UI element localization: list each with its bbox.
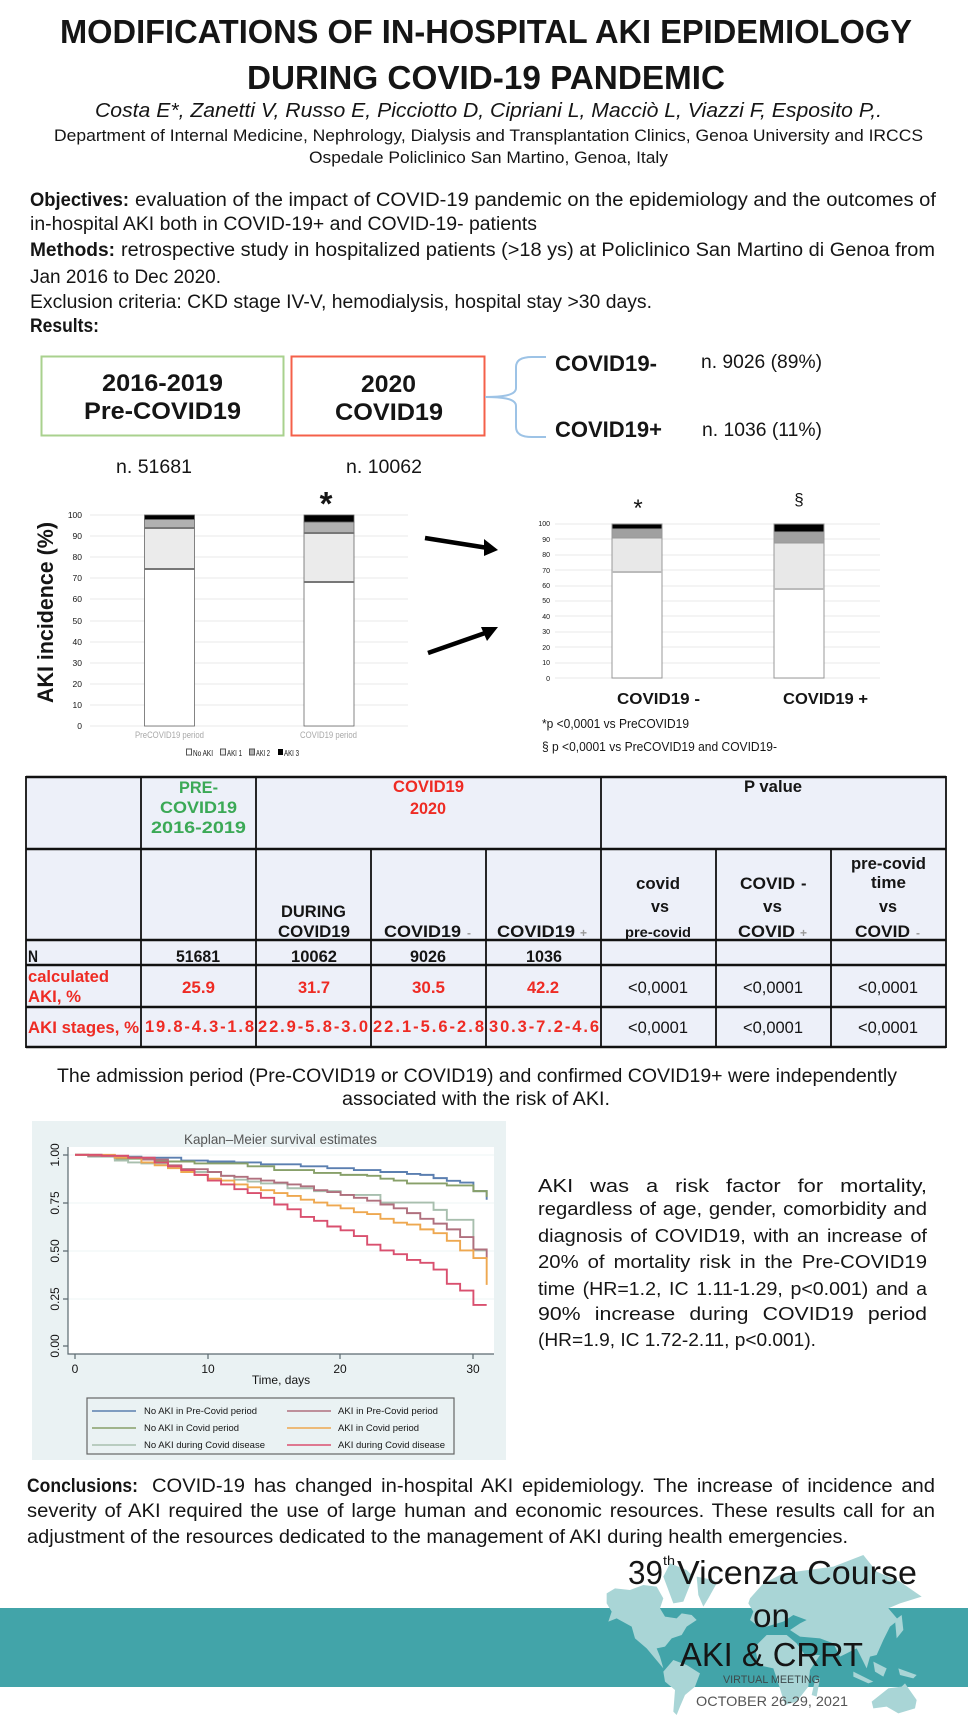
text block: conclusions: adjustment of the resources dedicated to the management of AKI during health emergencies. [27, 1527, 848, 1548]
text block: objectives and methods: in-hospital AKI both in COVID-19+ and COVID-19- patients [30, 214, 537, 235]
text block: conclusions [27, 1476, 935, 1548]
text block: objectives and methods: Objectives: [30, 190, 129, 211]
chart: AKI incidence by COVID status: 60 [542, 583, 550, 590]
text block: mortality risk [538, 1176, 928, 1350]
y axis labels: 0.00 [48, 1334, 62, 1358]
text block: independent association [57, 1066, 898, 1110]
text block: mortality risk: regardless of age, gender, comorbidity and [538, 1199, 927, 1219]
text block: objectives and methods: Methods: [30, 240, 115, 261]
subgroup labels: n. 9026 (89%) [701, 352, 822, 373]
chart: overall AKI incidence: 10 [73, 700, 82, 710]
survival legend: AKI during Covid disease [338, 1440, 445, 1451]
table subheader row: COVID [738, 923, 795, 941]
table subheader row: COVID19 [497, 923, 575, 941]
chart: AKI incidence by COVID status: 70 [542, 568, 550, 575]
table subheader row: COVID [855, 923, 910, 941]
chart: AKI incidence by COVID status: COVID19 + [783, 691, 868, 708]
title: DURING COVID-19 PANDEMIC [247, 59, 725, 96]
table header row: 2020 [410, 800, 446, 818]
brace connector [485, 357, 546, 437]
chart: AKI incidence by COVID status: 0 [546, 676, 550, 683]
table row: calculated AKI: 42.2 [527, 979, 559, 997]
survival curves [75, 1155, 487, 1305]
chart: Kaplan-Meier survival [32, 1121, 506, 1460]
chart: AKI incidence by COVID status: 20 [542, 645, 550, 652]
x axis labels: 0 [72, 1362, 79, 1376]
table subheader row: COVID19 [384, 923, 461, 941]
text block: objectives and methods: evaluation of the impact of COVID-19 pandemic on the epidemiology and the outcomes of [135, 190, 937, 211]
text block: objectives and methods: Exclusion criteria: CKD stage IV-V, hemodialysis, hospital stay >30 days. [30, 292, 652, 313]
table subheader row: vs [651, 898, 669, 916]
box: 2020 COVID19: 2020 [361, 371, 416, 398]
bar: COVID19 negative [612, 524, 662, 678]
text block: conclusions: severity of AKI required the use of large human and economic resources. These results call for an [27, 1501, 935, 1522]
arrow: up to right chart [428, 627, 498, 653]
logo text: 39th Vicenza Course on AKI & CRRT: Vicenza Course [677, 1554, 917, 1591]
text block: conclusions: Conclusions: [27, 1476, 138, 1497]
survival legend: No AKI in Covid period [144, 1423, 239, 1434]
sample sizes: n. 51681 [116, 457, 192, 478]
chart: overall AKI incidence: 80 [73, 552, 82, 562]
text block: mortality risk: AKI was a risk factor for mortality, [538, 1176, 927, 1196]
affiliation: Department of Internal Medicine, Nephrology, Dialysis and Transplantation Clinics, Genoa University and IRCCS [54, 127, 923, 145]
world map [607, 1555, 922, 1715]
table subheader row: pre-covid [851, 855, 926, 873]
footnotes: § p <0,0001 vs PreCOVID19 and COVID19- [542, 740, 777, 754]
affiliation [54, 127, 923, 167]
table subheader row: + [800, 926, 807, 940]
chart: overall AKI incidence: 20 [73, 679, 82, 689]
table header row: COVID19 [393, 778, 464, 796]
table row: N: 51681 [176, 948, 220, 966]
box: 2016-2019 Pre-COVID19 [42, 356, 284, 436]
table row: calculated AKI: 25.9 [182, 979, 215, 997]
chart legend [186, 749, 299, 758]
y axis title: AKI incidence (%) [33, 522, 58, 703]
table row: AKI stages: <0,0001 [628, 1019, 688, 1037]
chart: AKI incidence by COVID status: § [794, 490, 804, 509]
survival legend: AKI in Pre-Covid period [338, 1406, 438, 1417]
subgroup labels: COVID19- [555, 351, 657, 376]
table row: calculated AKI: <0,0001 [628, 979, 688, 997]
authors: Costa E*, Zanetti V, Russo E, Picciotto D, Cipriani L, Macciò L, Viazzi F, Esposito P,. [95, 100, 882, 122]
table subheader row: covid [636, 875, 680, 893]
table header row: 2016-2019 [151, 819, 246, 837]
table row: AKI stages: <0,0001 [858, 1019, 918, 1037]
chart: overall AKI incidence: 30 [73, 658, 82, 668]
box: 2020 COVID19 [292, 356, 484, 436]
chart: overall AKI incidence: 100 [68, 510, 82, 520]
chart: overall AKI incidence: 0 [77, 721, 82, 731]
chart: overall AKI incidence: 60 [73, 594, 82, 604]
table subheader row: + [580, 926, 587, 940]
table subheader row: COVID [740, 875, 795, 893]
x axis labels: 20 [333, 1362, 347, 1376]
text block: mortality risk: time (HR=1.2, IC 1.11-1.29, p<0.001) and a [538, 1279, 928, 1299]
chart: AKI incidence by COVID status [538, 490, 880, 708]
table row: AKI stages: 30.3-7.2-4.6 [489, 1018, 599, 1036]
table row: calculated AKI [28, 968, 918, 1006]
chart: AKI incidence by COVID status: 90 [542, 537, 550, 544]
title: MODIFICATIONS OF IN-HOSPITAL AKI EPIDEMIOLOGY [60, 13, 912, 50]
chart: overall AKI incidence: 70 [73, 573, 82, 583]
table row: calculated AKI: 30.5 [412, 979, 445, 997]
logo text: 39th Vicenza Course on AKI & CRRT: 39 [628, 1554, 663, 1591]
chart: Kaplan-Meier survival: Kaplan–Meier survival estimates [184, 1131, 377, 1147]
chart: overall AKI incidence [68, 510, 408, 758]
significance asterisk: * [320, 485, 333, 522]
table subheader row: - [916, 926, 920, 940]
table subheader row: vs [879, 898, 897, 916]
sample sizes [116, 457, 422, 478]
text block: mortality risk: 90% increase during COVID19 period [538, 1304, 927, 1324]
text block: mortality risk: (HR=1.9, IC 1.72-2.11, p<0.001). [538, 1330, 816, 1350]
logo text: 39th Vicenza Course on AKI & CRRT [628, 1553, 917, 1709]
table row: AKI stages: <0,0001 [743, 1019, 803, 1037]
logo text: 39th Vicenza Course on AKI & CRRT: on [753, 1597, 790, 1634]
chart: AKI incidence by COVID status: COVID19 - [617, 691, 700, 708]
chart: overall AKI incidence: PreCOVID19 period [135, 730, 204, 740]
table subheader row: COVID19 [278, 923, 350, 941]
chart: overall AKI incidence: 50 [73, 616, 82, 626]
survival legend: No AKI in Pre-Covid period [144, 1406, 257, 1417]
chart legend: AKI 1 [227, 749, 242, 758]
text block: conclusions: COVID-19 has changed in-hospital AKI epidemiology. The increase of incidence and [152, 1476, 935, 1497]
x axis labels [72, 1362, 480, 1387]
y axis labels: 0.75 [48, 1191, 62, 1215]
table subheader row: - [801, 875, 806, 893]
footnotes [542, 717, 777, 754]
table header row: P value [744, 778, 802, 796]
subgroup labels [555, 351, 822, 442]
table header row: COVID19 [160, 799, 237, 817]
y axis labels [48, 1143, 62, 1358]
table subheader row: - [467, 926, 471, 940]
table row: AKI stages: 19.8-4.3-1.8 [145, 1018, 254, 1036]
table header row: PRE- [179, 779, 218, 797]
table subheader row: time [871, 874, 906, 892]
affiliation: Ospedale Policlinico San Martino, Genoa, Italy [309, 149, 669, 167]
subgroup labels: COVID19+ [555, 417, 662, 442]
chart: AKI incidence by COVID status: 80 [542, 552, 550, 559]
text block: objectives and methods [30, 190, 937, 337]
chart: AKI incidence by COVID status: 30 [542, 629, 550, 636]
footer band [0, 1608, 968, 1687]
y axis labels: 1.00 [48, 1143, 62, 1167]
text block: independent association: The admission period (Pre-COVID19 or COVID19) and confirmed COVID19+ were independently [57, 1066, 898, 1087]
table subheader row: pre-covid [625, 924, 691, 940]
table row: AKI stages: 22.9-5.8-3.0 [258, 1018, 368, 1036]
chart: overall AKI incidence: COVID19 period [300, 730, 357, 740]
table subheader row: vs [763, 898, 782, 916]
bar: COVID19 positive [774, 524, 824, 678]
title [60, 13, 912, 96]
table row: N [28, 948, 562, 966]
chart: AKI incidence by COVID status: 10 [542, 660, 550, 667]
chart legend: AKI 3 [284, 749, 299, 758]
survival legend: AKI in Covid period [338, 1423, 419, 1434]
chart: AKI incidence by COVID status: * [633, 495, 643, 522]
y axis labels: 0.50 [48, 1239, 62, 1263]
logo text: 39th Vicenza Course on AKI & CRRT: VIRTUAL MEETING [723, 1674, 820, 1686]
box: 2016-2019 Pre-COVID19: 2016-2019 [102, 370, 223, 397]
text block: objectives and methods: Results: [30, 316, 99, 337]
table header row [151, 778, 802, 837]
x axis labels: 30 [466, 1362, 480, 1376]
box: 2016-2019 Pre-COVID19: Pre-COVID19 [84, 398, 241, 425]
table row: AKI stages: AKI stages, % [28, 1019, 139, 1037]
table [26, 776, 946, 1048]
logo text: 39th Vicenza Course on AKI & CRRT: th [663, 1553, 675, 1568]
text block: mortality risk: diagnosis of COVID19, with an increase of [538, 1226, 928, 1246]
text block: objectives and methods: Jan 2016 to Dec 2020. [30, 267, 221, 288]
y axis labels: 0.25 [48, 1287, 62, 1311]
text block: independent association: associated with the risk of AKI. [342, 1089, 610, 1110]
chart: AKI incidence by COVID status: 40 [542, 614, 550, 621]
text block: objectives and methods: retrospective study in hospitalized patients (>18 ys) at Policlinico San Martino di Genoa from [121, 240, 935, 261]
chart: overall AKI incidence: 40 [73, 637, 82, 647]
survival legend [87, 1398, 454, 1454]
subgroup labels: n. 1036 (11%) [702, 420, 822, 441]
box: 2020 COVID19: COVID19 [335, 399, 443, 426]
table row: calculated AKI: <0,0001 [743, 979, 803, 997]
table row: calculated AKI: calculated [28, 968, 109, 986]
x axis labels: Time, days [252, 1373, 310, 1387]
table row: AKI stages [28, 1018, 918, 1037]
table subheader row: DURING [281, 903, 346, 921]
table row: calculated AKI: AKI, % [28, 988, 81, 1006]
x axis labels: 10 [201, 1362, 215, 1376]
table row: N: 9026 [410, 948, 446, 966]
table subheader row [278, 855, 926, 941]
table row: N: 1036 [526, 948, 562, 966]
logo text: 39th Vicenza Course on AKI & CRRT: AKI & CRRT [680, 1636, 863, 1673]
footnotes: *p <0,0001 vs PreCOVID19 [542, 717, 689, 731]
chart: overall AKI incidence: 90 [73, 531, 82, 541]
chart legend: No AKI [193, 749, 213, 758]
survival legend: No AKI during Covid disease [144, 1440, 265, 1451]
table row: calculated AKI: <0,0001 [858, 979, 918, 997]
arrow: down to right chart [425, 538, 498, 556]
table row: AKI stages: 22.1-5.6-2.8 [373, 1018, 484, 1036]
table row: N: 10062 [291, 948, 337, 966]
chart: AKI incidence by COVID status: 100 [538, 521, 550, 528]
sample sizes: n. 10062 [346, 457, 422, 478]
chart: AKI incidence by COVID status: 50 [542, 598, 550, 605]
chart legend: AKI 2 [256, 749, 270, 758]
table row: N: N [28, 948, 38, 966]
bar: COVID19 period [304, 515, 354, 726]
text block: mortality risk: 20% of mortality risk in the Pre-COVID19 [538, 1252, 927, 1272]
table row: calculated AKI: 31.7 [298, 979, 330, 997]
bar: Pre-COVID19 period [144, 515, 194, 726]
logo text: 39th Vicenza Course on AKI & CRRT: OCTOBER 26-29, 2021 [696, 1693, 848, 1709]
